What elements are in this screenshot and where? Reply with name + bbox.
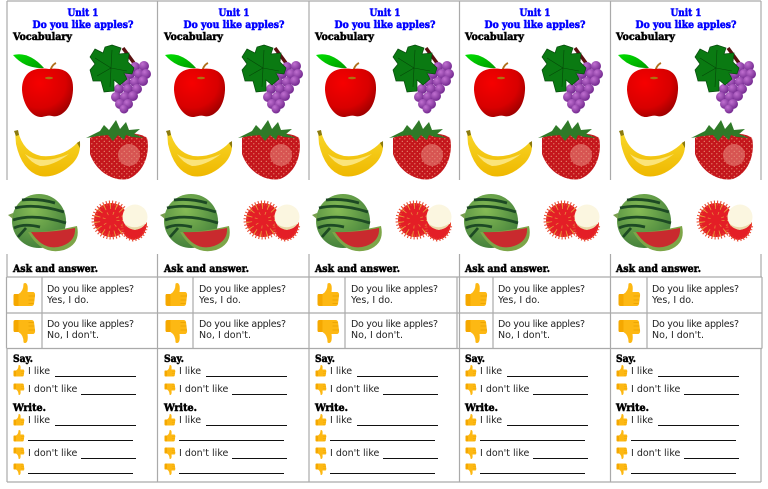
icon: grapes xyxy=(695,45,756,114)
title xyxy=(484,7,586,31)
answer lines xyxy=(631,376,739,474)
section: say: I don't like xyxy=(631,384,680,395)
table row: like: Yes, I do. xyxy=(350,295,393,306)
title: Unit 1 xyxy=(670,7,702,19)
answer lines xyxy=(28,376,136,474)
title: Unit 1 xyxy=(370,7,400,19)
section: write: Write. xyxy=(163,402,197,414)
heading: vocabulary: Vocabulary xyxy=(464,31,525,43)
section: write xyxy=(12,402,77,475)
icon: apple xyxy=(618,54,678,117)
icon: rambutan xyxy=(94,203,148,240)
section: write xyxy=(615,402,680,475)
heading: vocabulary: Vocabulary xyxy=(314,31,375,43)
table row: dislike xyxy=(14,319,134,343)
answer lines xyxy=(480,376,588,474)
table row: like xyxy=(166,283,286,306)
heading: ask and answer: Ask and answer. xyxy=(314,263,400,275)
answer lines xyxy=(330,376,438,474)
section: write: Write. xyxy=(464,402,498,414)
heading: ask and answer: Ask and answer. xyxy=(464,263,550,275)
table row: dislike: Do you like apples? xyxy=(199,319,286,330)
table row: dislike xyxy=(318,319,438,343)
table row: dislike: No, I don't. xyxy=(47,330,99,341)
panel: worksheet 4 xyxy=(460,7,603,475)
section: say: Say. xyxy=(13,353,33,365)
icon: grapes xyxy=(90,45,151,114)
heading: vocabulary: Vocabulary xyxy=(163,31,224,43)
section: write xyxy=(314,402,379,475)
section: say: I like xyxy=(28,366,50,377)
table row: like: Do you like apples? xyxy=(47,284,134,295)
title: Unit 1 xyxy=(520,7,550,19)
icon: strawberry xyxy=(691,120,753,180)
section: say xyxy=(164,353,228,395)
heading: vocabulary: Vocabulary xyxy=(12,31,73,43)
panel: worksheet 5 xyxy=(613,7,756,475)
icon: strawberry xyxy=(86,120,148,180)
section: say: I like xyxy=(631,366,653,377)
icon: rambutan xyxy=(246,203,300,240)
icon: banana xyxy=(317,130,383,176)
section: say: I don't like xyxy=(330,384,379,395)
table row: dislike: No, I don't. xyxy=(652,330,704,341)
table row: dislike: Do you like apples? xyxy=(351,319,438,330)
icon: banana xyxy=(14,130,80,176)
title xyxy=(184,7,284,31)
panel: worksheet 1 xyxy=(8,7,151,475)
title: Do you like apples? xyxy=(636,19,736,31)
table row: like xyxy=(14,283,134,306)
title xyxy=(334,7,436,31)
title: Do you like apples? xyxy=(334,19,436,31)
table row: dislike xyxy=(618,319,739,343)
table row: like xyxy=(318,283,438,306)
table row: dislike: Do you like apples? xyxy=(498,319,585,330)
icon: watermelon xyxy=(160,194,230,251)
icon: rambutan xyxy=(398,203,452,240)
heading: ask and answer: Ask and answer. xyxy=(12,263,98,275)
section: say: I like xyxy=(330,366,352,377)
section: write: I like xyxy=(631,415,653,426)
section: say: I don't like xyxy=(480,384,529,395)
section: write: Write. xyxy=(314,402,348,414)
section: say xyxy=(13,353,77,395)
section: write: I don't like xyxy=(631,448,680,459)
section: say xyxy=(315,353,379,395)
icon: rambutan xyxy=(546,203,600,240)
table row: dislike: Do you like apples? xyxy=(47,319,134,330)
icon: watermelon xyxy=(613,194,683,251)
table row: dislike: Do you like apples? xyxy=(652,319,739,330)
section: say: Say. xyxy=(315,353,335,365)
table row: like: Do you like apples? xyxy=(498,284,585,295)
table row: like: Yes, I do. xyxy=(651,295,694,306)
section: say: I like xyxy=(480,366,502,377)
section: write xyxy=(464,402,529,475)
section: write: Write. xyxy=(615,402,649,414)
section: say: I don't like xyxy=(179,384,228,395)
section: say xyxy=(465,353,529,395)
table row: dislike: No, I don't. xyxy=(351,330,403,341)
icon: apple xyxy=(165,54,225,117)
heading: ask and answer: Ask and answer. xyxy=(163,263,249,275)
icon: apple xyxy=(13,54,73,117)
panel: worksheet 2 xyxy=(160,7,303,475)
icon: grapes xyxy=(393,45,454,114)
table row: dislike xyxy=(166,319,286,343)
icon: grapes xyxy=(242,45,303,114)
icon: apple xyxy=(465,54,525,117)
table row: like: Yes, I do. xyxy=(46,295,89,306)
icon: strawberry xyxy=(389,120,451,180)
title: Do you like apples? xyxy=(32,19,134,31)
section: say xyxy=(616,353,680,395)
icon: watermelon xyxy=(312,194,382,251)
title: Do you like apples? xyxy=(184,19,284,31)
title: Do you like apples? xyxy=(484,19,586,31)
table row: like: Yes, I do. xyxy=(497,295,540,306)
icon: grapes xyxy=(542,45,603,114)
table row: dislike xyxy=(466,319,585,343)
section: say: Say. xyxy=(465,353,485,365)
section: say: I don't like xyxy=(28,384,77,395)
table row: dislike: No, I don't. xyxy=(199,330,251,341)
icon: watermelon xyxy=(460,194,530,251)
title: Unit 1 xyxy=(218,7,250,19)
icon: strawberry xyxy=(238,120,300,180)
section: write xyxy=(163,402,228,475)
table row: like: Do you like apples? xyxy=(351,284,438,295)
section: write: I like xyxy=(179,415,201,426)
table row: like: Yes, I do. xyxy=(198,295,241,306)
table row: like xyxy=(466,283,585,306)
table row: like: Do you like apples? xyxy=(652,284,739,295)
table row: like: Do you like apples? xyxy=(199,284,286,295)
section: write: I like xyxy=(480,415,502,426)
icon: strawberry xyxy=(538,120,600,180)
icon: banana xyxy=(619,130,685,176)
section: say: I like xyxy=(179,366,201,377)
table row: dislike: No, I don't. xyxy=(498,330,550,341)
section: write: I like xyxy=(28,415,50,426)
section: write: I don't like xyxy=(179,448,228,459)
icon: apple xyxy=(316,54,376,117)
section: say: Say. xyxy=(164,353,184,365)
icon: watermelon xyxy=(8,194,78,251)
icon: banana xyxy=(466,130,532,176)
answer lines xyxy=(179,376,287,474)
table row: like xyxy=(618,283,739,306)
section: write: I don't like xyxy=(28,448,77,459)
section: say: Say. xyxy=(616,353,636,365)
section: write: I don't like xyxy=(480,448,529,459)
section: write: I like xyxy=(330,415,352,426)
icon: rambutan xyxy=(699,203,752,240)
title xyxy=(636,7,736,31)
section: write: Write. xyxy=(12,402,46,414)
section: write: I don't like xyxy=(330,448,379,459)
icon: banana xyxy=(166,130,232,176)
panel: worksheet 3 xyxy=(312,7,454,475)
title: Unit 1 xyxy=(68,7,98,19)
title xyxy=(32,7,134,31)
heading: ask and answer: Ask and answer. xyxy=(615,263,701,275)
heading: vocabulary: Vocabulary xyxy=(615,31,676,43)
